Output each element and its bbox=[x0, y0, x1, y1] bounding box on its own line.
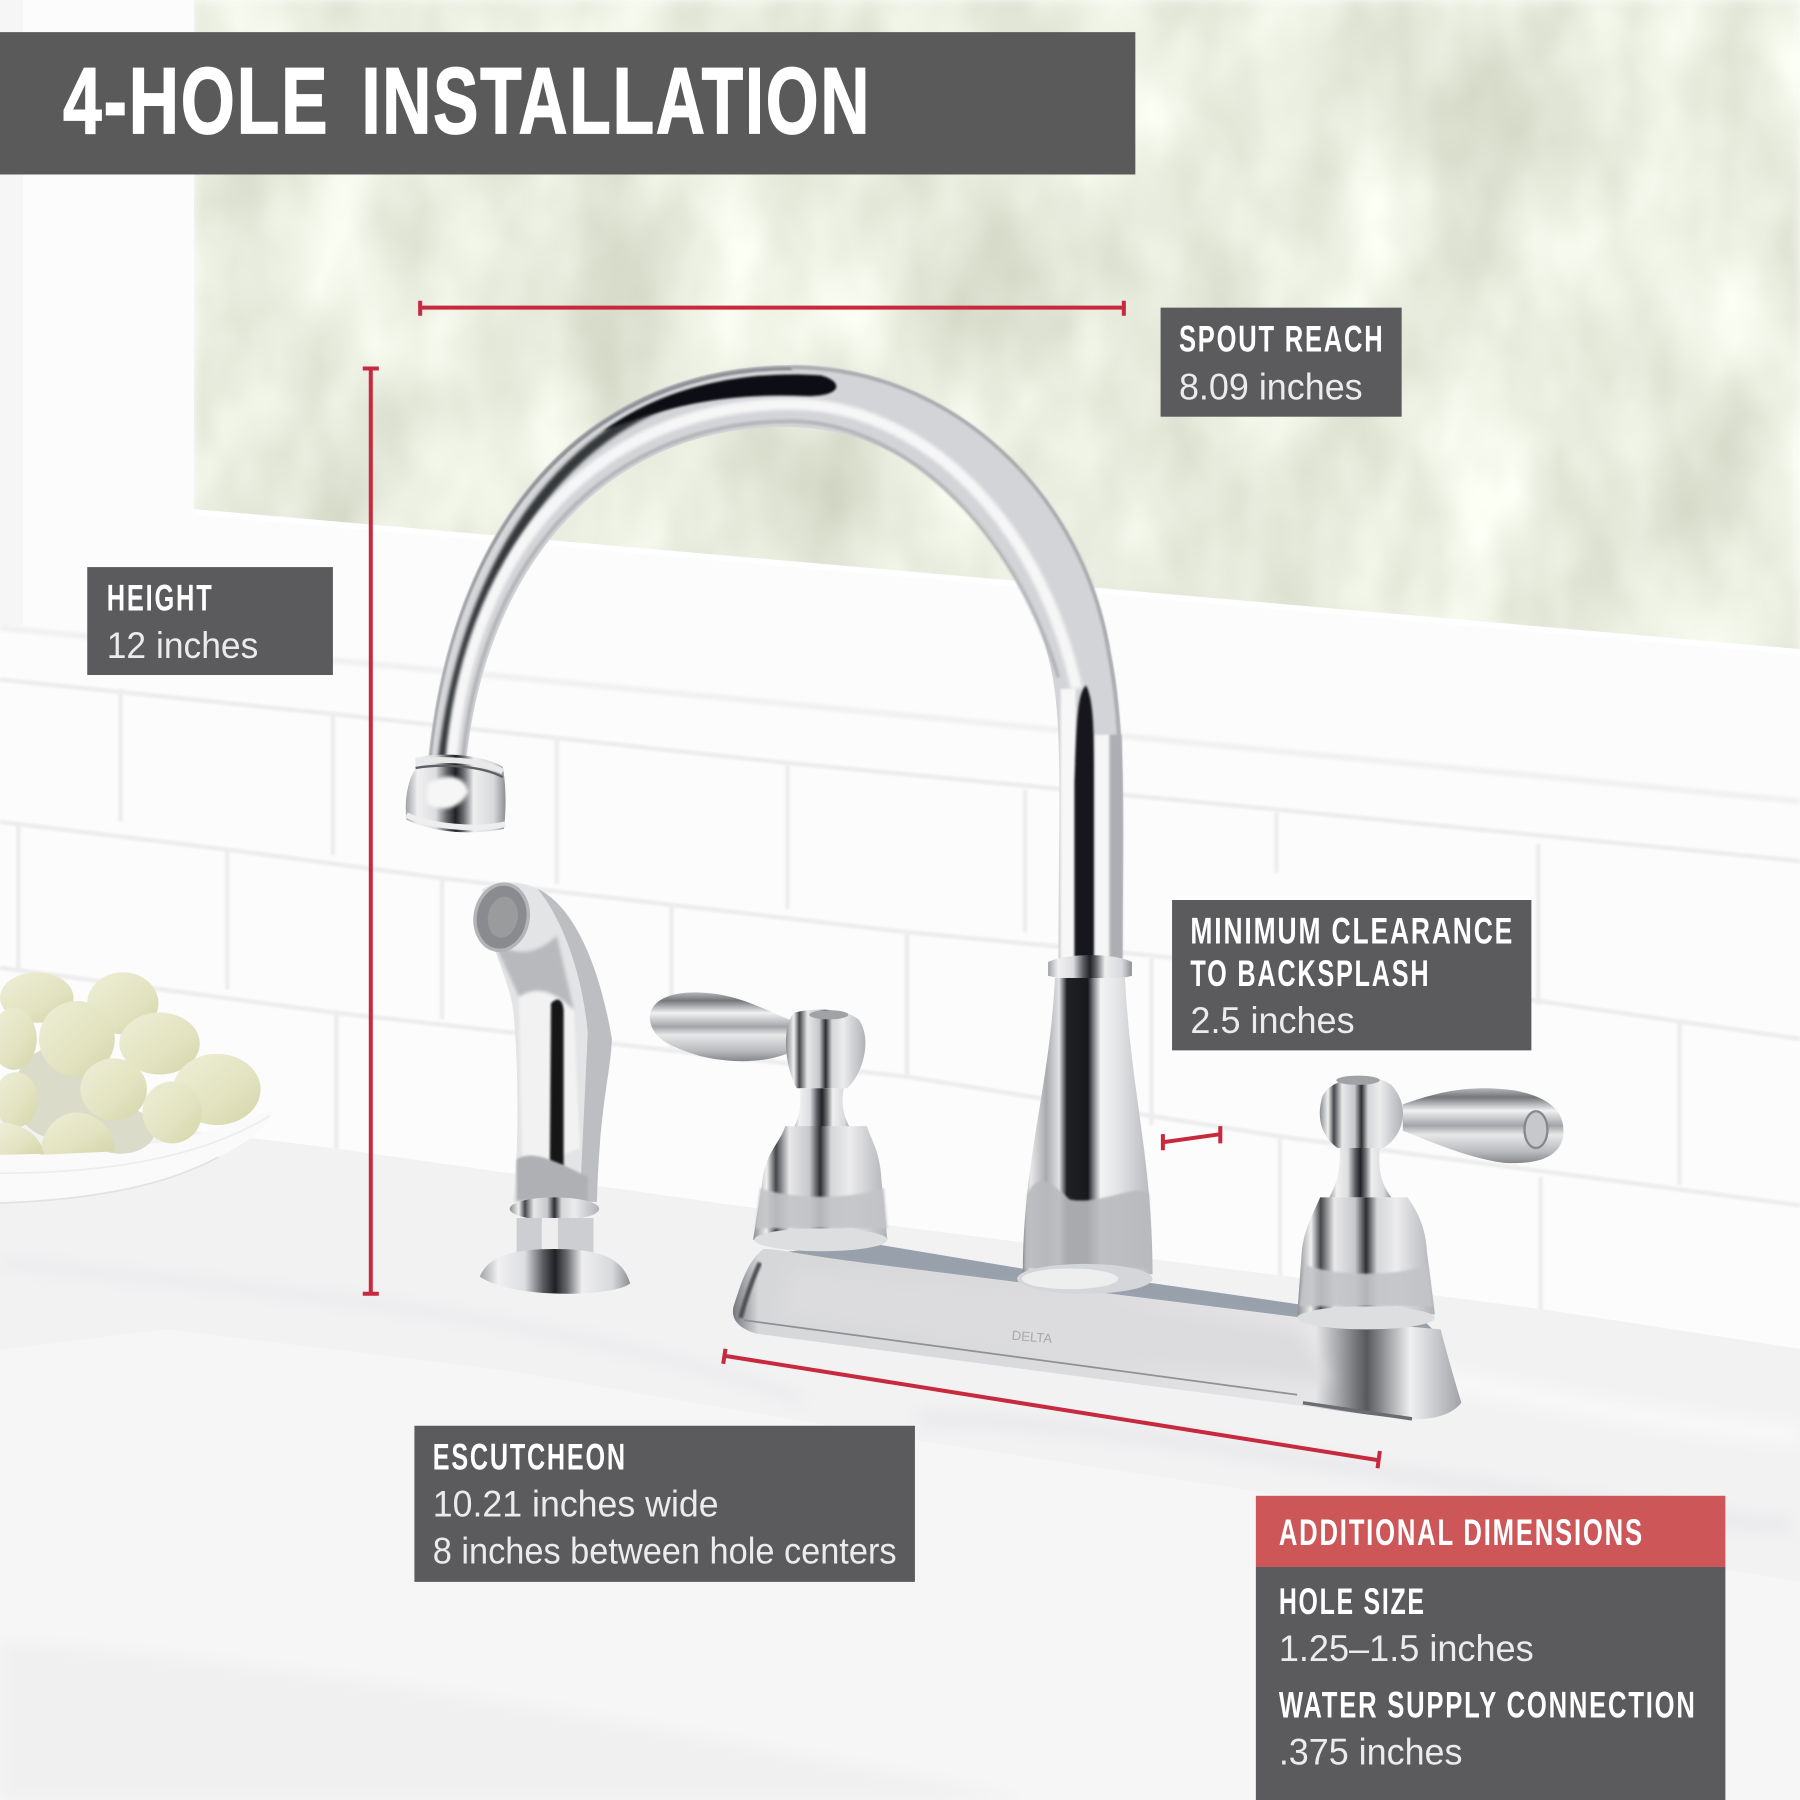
callout: minimum clearance: MINIMUM CLEARANCE bbox=[1190, 911, 1514, 952]
callout: escutcheon bbox=[414, 1426, 915, 1582]
tiled wall and sill bbox=[0, 511, 1800, 1378]
brand mark: DELTA bbox=[1011, 1328, 1053, 1346]
callout: spout reach bbox=[1161, 308, 1402, 417]
title banner: INSTALLATION bbox=[362, 48, 871, 153]
panel: additional dimensions: 1.25–1.5 inches bbox=[1279, 1628, 1534, 1669]
left arc highlights bbox=[432, 368, 792, 760]
dimension line: escutcheon bbox=[723, 1349, 1380, 1468]
title banner bbox=[0, 32, 1135, 174]
marble countertop bbox=[0, 1108, 1800, 1584]
callout: height: HEIGHT bbox=[107, 578, 214, 619]
callout: escutcheon: 8 inches between hole centers bbox=[433, 1531, 897, 1572]
callout: escutcheon: 10.21 inches wide bbox=[433, 1483, 719, 1524]
plate bbox=[0, 1110, 273, 1203]
panel: additional dimensions: HOLE SIZE bbox=[1279, 1581, 1426, 1622]
faucet bbox=[406, 365, 1564, 1419]
dimension line: spout reach bbox=[420, 301, 1124, 316]
panel heading: ADDITIONAL DIMENSIONS bbox=[1279, 1512, 1644, 1553]
dimension line: height bbox=[363, 368, 379, 1294]
callout: spout reach: SPOUT REACH bbox=[1179, 318, 1384, 359]
panel: additional dimensions: .375 inches bbox=[1279, 1731, 1462, 1772]
spout bbox=[428, 365, 1123, 959]
callout: spout reach: 8.09 inches bbox=[1179, 366, 1363, 407]
window frame, left bbox=[0, 0, 194, 643]
callout: height: 12 inches bbox=[107, 625, 258, 666]
callout: height bbox=[87, 567, 333, 675]
callout: minimum clearance: 2.5 inches bbox=[1190, 1000, 1355, 1041]
callout: minimum clearance: TO BACKSPLASH bbox=[1190, 953, 1430, 994]
escutcheon deck bbox=[733, 1249, 1461, 1419]
bowl of grapes bbox=[0, 972, 273, 1203]
dimension line: clearance bbox=[1163, 1126, 1220, 1150]
right handle bbox=[1297, 1076, 1564, 1329]
callout: minimum clearance bbox=[1172, 900, 1531, 1050]
title banner: 4-HOLE bbox=[63, 48, 329, 153]
window view background bbox=[194, 0, 1800, 689]
left handle bbox=[650, 992, 887, 1251]
side sprayer bbox=[470, 880, 630, 1294]
right arc highlights bbox=[792, 367, 1121, 959]
spout tip bbox=[406, 755, 506, 832]
shaft reflections bbox=[1061, 689, 1076, 959]
panel heading bbox=[1256, 1496, 1725, 1567]
central column bbox=[1017, 955, 1153, 1294]
callout: escutcheon: ESCUTCHEON bbox=[433, 1436, 627, 1477]
deck top bbox=[758, 1243, 1441, 1337]
panel: additional dimensions bbox=[1256, 1496, 1725, 1800]
sink basin bbox=[0, 1329, 1800, 1800]
